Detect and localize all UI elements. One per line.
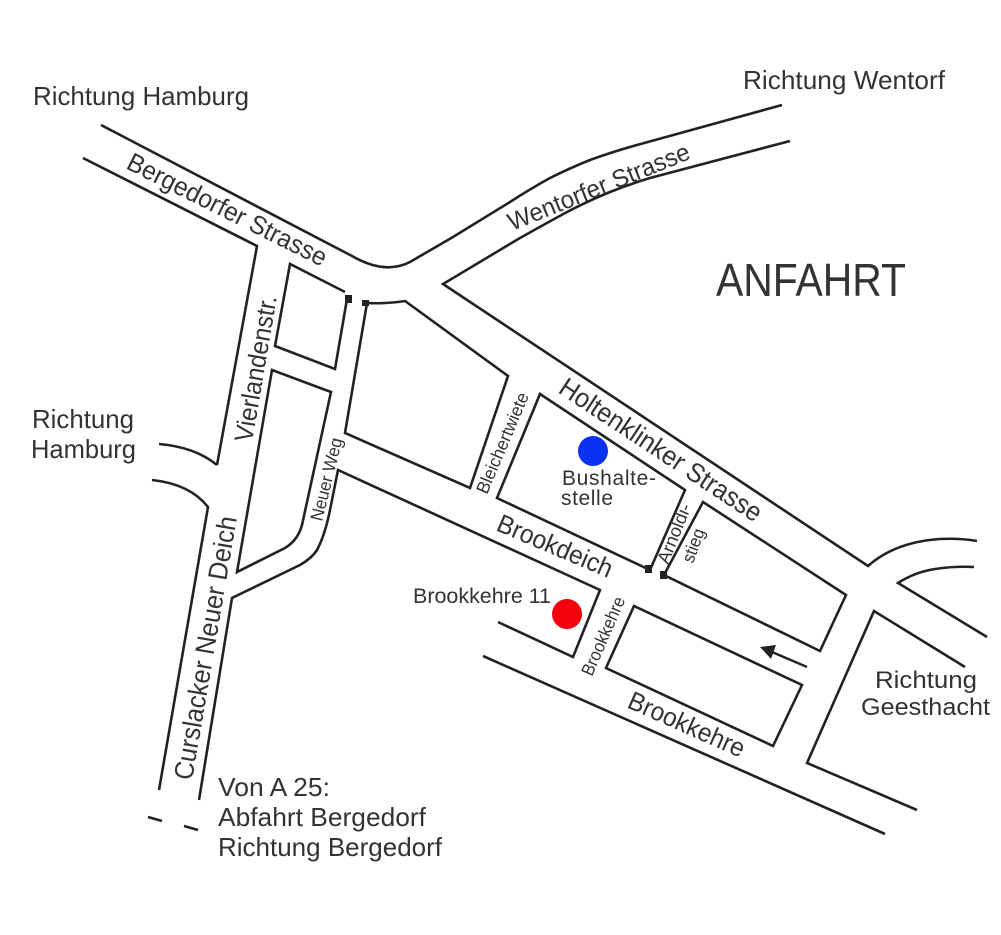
street names: Holtenklinker Strasse (554, 372, 768, 528)
destination marker (552, 599, 582, 629)
street names: Brookdeich (493, 508, 618, 584)
title: ANFAHRT (716, 254, 906, 306)
direction labels: Richtung (32, 404, 134, 434)
street names: Brookkehre (577, 594, 629, 679)
road network (83, 105, 987, 834)
direction labels: Richtung (875, 667, 977, 694)
street names: Bergedorfer Strasse (122, 147, 332, 272)
place labels: Bushalte- (562, 467, 656, 490)
highway directions: Von A 25: (218, 772, 330, 802)
highway directions: Abfahrt Bergedorf (218, 802, 427, 832)
road barriers (345, 295, 667, 579)
street names: Curslacker Neuer Deich (168, 514, 243, 782)
place labels (413, 467, 656, 608)
place labels: stelle (561, 487, 613, 510)
place labels: Brookkehre 11 (413, 585, 551, 608)
street names: Neuer Weg (306, 436, 346, 523)
highway directions (218, 772, 443, 862)
highway directions: Richtung Bergedorf (218, 832, 443, 862)
direction labels: Richtung Wentorf (743, 65, 946, 95)
arrow: one-way direction (760, 645, 807, 667)
street names: Vierlandenstr. (228, 293, 283, 444)
street names: Brookkehre (624, 685, 750, 763)
direction labels: Geesthacht (861, 694, 990, 721)
street names (122, 138, 768, 782)
bus stop marker (578, 436, 608, 466)
direction labels: Richtung Hamburg (33, 81, 249, 111)
street names: Wentorfer Strasse (504, 138, 694, 237)
direction labels (31, 65, 990, 721)
street names: Bleichertwiete (472, 389, 533, 497)
street names: stieg (678, 526, 709, 565)
direction labels: Hamburg (31, 434, 136, 464)
street names: Arnoldi- (653, 501, 695, 566)
